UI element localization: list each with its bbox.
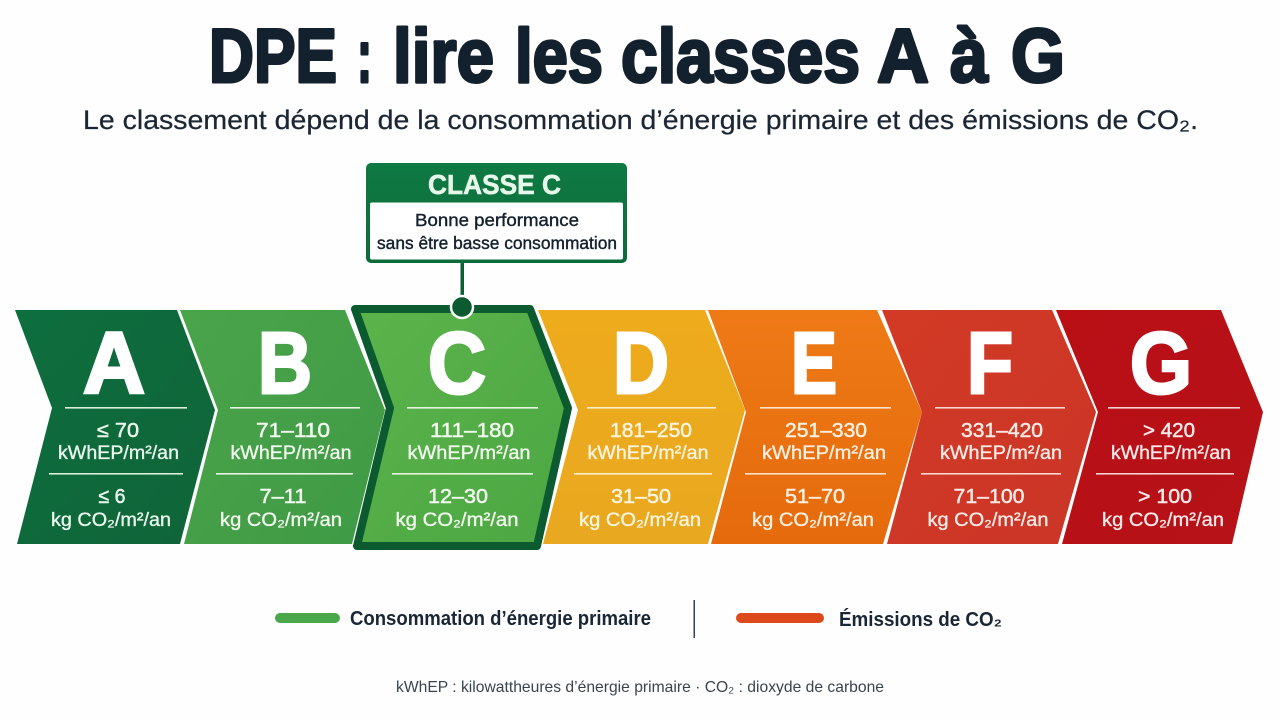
callout: classe C: sans être basse consommation (377, 233, 617, 253)
class E chevron: kg CO₂/m²/an (752, 509, 874, 531)
class C highlighted chevron (355, 309, 568, 546)
callout: classe C (366, 163, 627, 318)
class A chevron: A (83, 315, 145, 412)
legend (275, 600, 1002, 638)
class G chevron (1056, 310, 1263, 544)
class D chevron: 181–250 (610, 419, 692, 442)
class C highlighted chevron: kg CO₂/m²/an (396, 509, 518, 531)
legend: consommation: Consommation d’énergie primaire (350, 608, 651, 630)
class G chevron: kWhEP/m²/an (1111, 442, 1231, 464)
class A chevron: kWhEP/m²/an (58, 442, 179, 464)
title: à (950, 14, 989, 99)
legend: émissions (736, 608, 1002, 631)
class F chevron (882, 310, 1096, 544)
callout: classe C: CLASSE C (428, 169, 561, 200)
title: DPE (209, 14, 337, 99)
footnote: kWhEP : kilowattheures d’énergie primaire · CO₂ : dioxyde de carbone (396, 679, 884, 696)
class G chevron: > 100 (1138, 485, 1192, 508)
class B chevron: 71–110 (256, 419, 330, 442)
class B chevron: B (258, 315, 312, 412)
class D chevron: D (613, 315, 669, 412)
class C highlighted chevron: C (428, 315, 486, 412)
class C highlighted chevron: kWhEP/m²/an (408, 442, 530, 464)
class E chevron: 51–70 (785, 485, 845, 508)
class B chevron: kg CO₂/m²/an (220, 509, 342, 531)
class C highlighted chevron: 12–30 (428, 485, 488, 508)
class E chevron: kWhEP/m²/an (762, 442, 886, 464)
title: classes (621, 14, 860, 99)
class D chevron: 31–50 (611, 485, 671, 508)
class B chevron: kWhEP/m²/an (230, 442, 352, 464)
class D chevron: kg CO₂/m²/an (579, 509, 701, 531)
class D chevron (538, 310, 745, 544)
subtitle: Le classement dépend de la consommation d’énergie primaire et des émissions de CO₂. (83, 105, 1198, 135)
title: lire (393, 14, 494, 99)
class D chevron: kWhEP/m²/an (588, 442, 708, 464)
class A chevron: ≤ 6 (98, 485, 126, 508)
title: G (1011, 14, 1065, 99)
title: : (357, 14, 372, 99)
class G chevron: > 420 (1143, 419, 1195, 442)
class G chevron: kg CO₂/m²/an (1102, 509, 1224, 531)
class F chevron: kWhEP/m²/an (940, 442, 1062, 464)
title (209, 14, 1065, 99)
class F chevron: 331–420 (961, 419, 1043, 442)
legend: émissions: Émissions de CO₂ (839, 608, 1002, 631)
title: les (515, 14, 603, 99)
class B chevron (180, 310, 385, 544)
class E chevron (708, 310, 922, 544)
class B chevron: 7–11 (260, 485, 306, 508)
class E chevron: E (791, 315, 837, 412)
class A chevron: kg CO₂/m²/an (51, 509, 171, 531)
class A chevron (15, 310, 215, 544)
class F chevron: F (967, 315, 1013, 412)
class F chevron: kg CO₂/m²/an (928, 509, 1048, 531)
title: A (877, 14, 929, 99)
class A chevron: ≤ 70 (97, 419, 139, 442)
class G chevron: G (1130, 315, 1192, 412)
class F chevron: 71–100 (954, 485, 1024, 508)
class E chevron: 251–330 (785, 419, 867, 442)
class C highlighted chevron: 111–180 (430, 419, 514, 442)
callout: classe C: Bonne performance (415, 210, 579, 230)
